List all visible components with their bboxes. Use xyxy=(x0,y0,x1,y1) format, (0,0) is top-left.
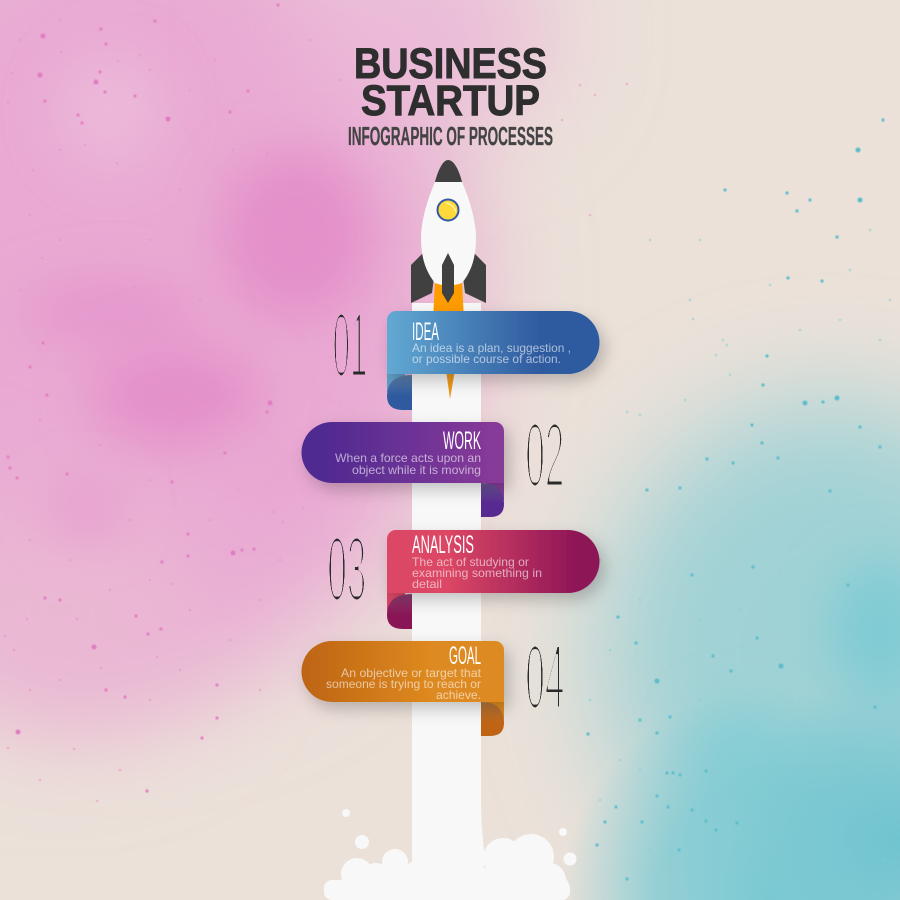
step 04 banner: goal: An objective or target that xyxy=(341,666,482,680)
step 01 number: 01 xyxy=(333,293,367,397)
step 01 banner: idea xyxy=(387,311,600,410)
white exhaust trail and smoke cloud xyxy=(324,303,576,900)
step 04 banner: goal: someone is trying to reach or xyxy=(326,677,481,691)
subtitle: INFOGRAPHIC OF PROCESSES xyxy=(348,121,553,151)
title xyxy=(354,40,547,125)
step 01 banner: idea: An idea is a plan, suggestion , xyxy=(412,341,571,355)
title: BUSINESS xyxy=(354,40,547,88)
step 03 banner: analysis: examining something in xyxy=(412,566,542,580)
step 02 banner: work: When a force acts upon an xyxy=(335,451,481,465)
step 02 number: 02 xyxy=(525,403,564,506)
step 02 banner: work: WORK xyxy=(443,427,481,455)
title: STARTUP xyxy=(361,77,540,125)
step 04 banner: goal: achieve. xyxy=(436,688,481,702)
step 01 banner: idea: IDEA xyxy=(412,318,439,346)
step 02 banner: work: object while it is moving xyxy=(352,463,481,477)
step 01 banner: idea: or possible course of action. xyxy=(412,352,561,366)
step 04 banner: goal xyxy=(301,641,504,736)
step 03 banner: analysis: The act of studying or xyxy=(412,555,529,569)
step 03 banner: analysis: ANALYSIS xyxy=(412,531,474,559)
rocket xyxy=(411,160,486,399)
step 03 banner: analysis: detail xyxy=(412,577,442,591)
step 02 banner: work xyxy=(301,422,504,517)
step 03 number: 03 xyxy=(327,517,366,620)
step 04 number: 04 xyxy=(525,625,564,728)
step 04 banner: goal: GOAL xyxy=(449,642,481,670)
step 03 banner: analysis xyxy=(387,530,600,629)
